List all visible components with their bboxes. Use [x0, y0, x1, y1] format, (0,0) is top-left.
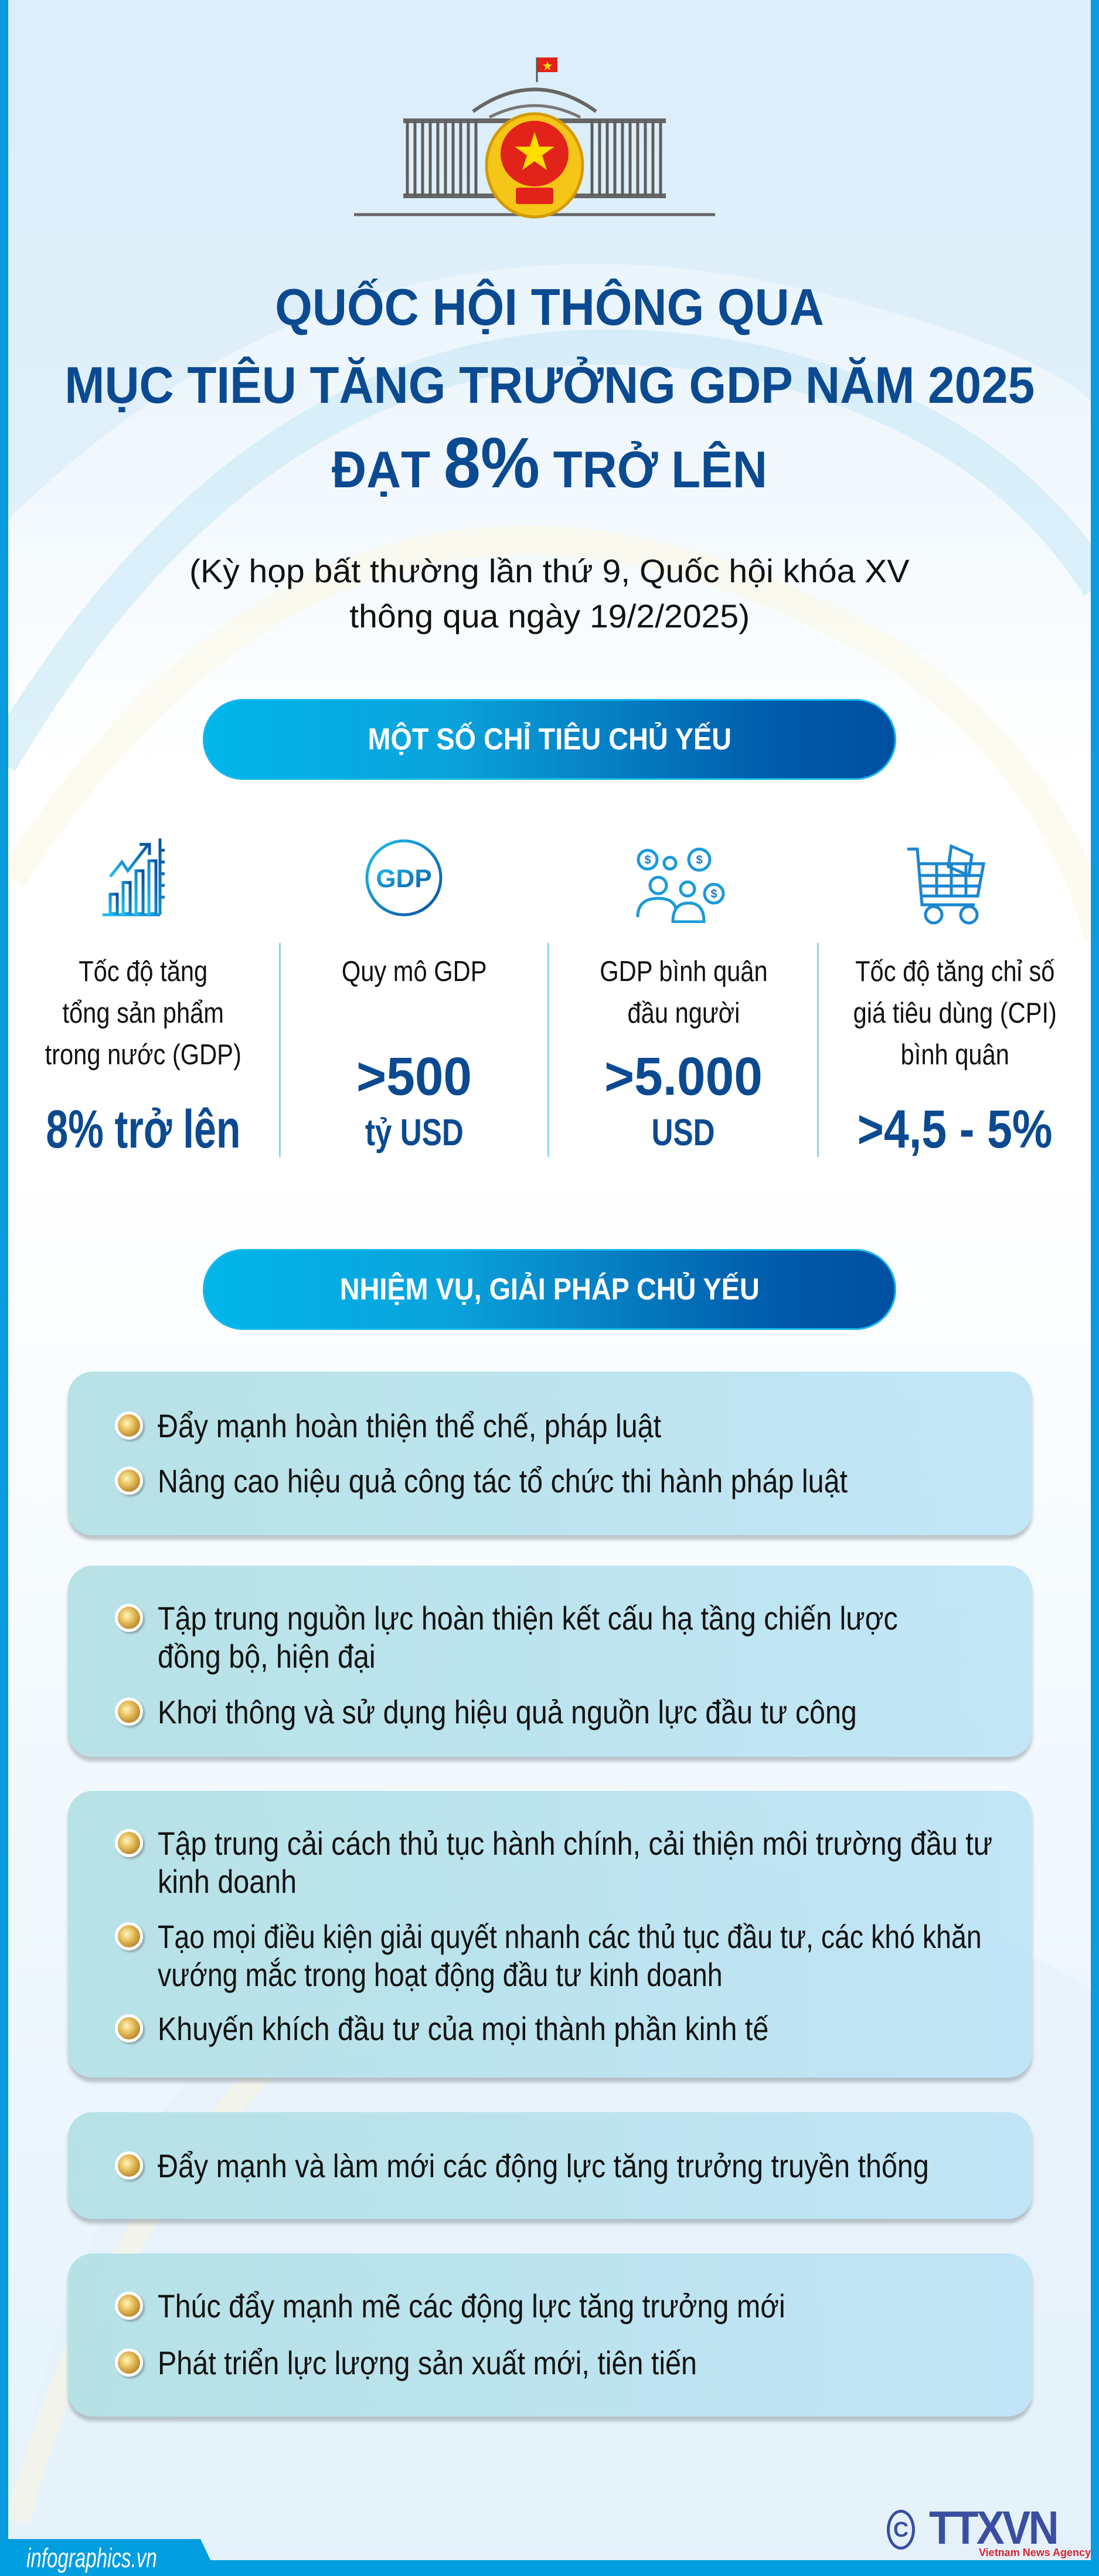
stat: GDP size: >500: [357, 1047, 472, 1107]
frame borders: [0, 0, 8, 2576]
panel: hạ tầng: [68, 1566, 1032, 1757]
stat: CPI: giá tiêu dùng (CPI): [853, 997, 1057, 1029]
panel: thể chế: [68, 1372, 1032, 1535]
panel: thủ tục hành chính: Tạo mọi điều kiện giải quyết nhanh các thủ tục đầu tư, các khó khăn: [158, 1918, 982, 1955]
subtitle: [189, 552, 910, 634]
heading: nhiệm vụ, giải pháp chủ yếu: [203, 1249, 896, 1330]
panel: thủ tục hành chính: [68, 1791, 1032, 2078]
panel: hạ tầng: Khơi thông và sử dụng hiệu quả nguồn lực đầu tư công: [158, 1693, 857, 1730]
icon: GDP: GDP: [376, 864, 432, 893]
panel: thủ tục hành chính: Tập trung cải cách thủ tục hành chính, cải thiện môi trường đầu tư: [158, 1825, 992, 1862]
footer tab: infographics.vn: [0, 2539, 211, 2573]
stat: GDP growth: tổng sản phẩm: [62, 997, 224, 1029]
icon: people with coins: $: [644, 854, 651, 867]
heading: một số chỉ tiêu chủ yếu: MỘT SỐ CHỈ TIÊU CHỦ YẾU: [368, 722, 731, 756]
panel: thủ tục hành chính: Khuyến khích đầu tư của mọi thành phần kinh tế: [158, 2010, 768, 2047]
stat: CPI: [853, 956, 1057, 1159]
panel: động lực mới: [68, 2253, 1032, 2417]
stat: GDP growth: 8% trở lên: [46, 1099, 240, 1159]
panel: thể chế: Đẩy mạnh hoàn thiện thể chế, pháp luật: [158, 1407, 661, 1444]
stat: GDP per capita: [600, 956, 767, 1153]
stat: CPI: Tốc độ tăng chỉ số: [855, 956, 1054, 987]
icon: shopping cart: [907, 844, 985, 924]
stat: GDP size: tỷ USD: [365, 1111, 464, 1153]
subtitle: (Kỳ họp bất thường lần thứ 9, Quốc hội khóa XV: [189, 552, 910, 589]
logo: TTXVN: TTXVN: [929, 2502, 1057, 2554]
icon: growth chart: [103, 839, 165, 916]
panel: thể chế: Nâng cao hiệu quả công tác tổ chức thi hành pháp luật: [158, 1462, 848, 1499]
stat: GDP size: Quy mô GDP: [342, 956, 487, 987]
panel: thủ tục hành chính: kinh doanh: [158, 1863, 297, 1900]
title: QUỐC HỘI THÔNG QUA: [275, 278, 824, 336]
panel: động lực mới: Phát triển lực lượng sản xuất mới, tiên tiến: [158, 2344, 697, 2381]
logo: TTXVN: Vietnam News Agency: [979, 2547, 1091, 2558]
title: [64, 278, 1035, 503]
panel: động lực truyền thống: [68, 2112, 1032, 2219]
stat: GDP growth: trong nước (GDP): [45, 1039, 241, 1071]
icon: people with coins: $: [696, 854, 703, 867]
panel: hạ tầng: đồng bộ, hiện đại: [158, 1638, 376, 1675]
dividers: [279, 943, 281, 1157]
stat: CPI: >4,5 - 5%: [858, 1099, 1052, 1159]
icon: people with coins: $: [710, 888, 717, 901]
icon: national assembly emblem: [354, 57, 715, 218]
panel: thủ tục hành chính: vướng mắc trong hoạt động đầu tư kinh doanh: [158, 1956, 723, 1993]
stat: GDP per capita: USD: [652, 1111, 715, 1153]
stat: GDP size: [342, 956, 487, 1153]
stat: GDP growth: [45, 956, 241, 1159]
stat: CPI: bình quân: [900, 1039, 1009, 1071]
stat: GDP per capita: đầu người: [627, 997, 740, 1029]
logo: TTXVN: C: [893, 2517, 909, 2541]
stat: GDP per capita: GDP bình quân: [600, 956, 767, 987]
subtitle: thông qua ngày 19/2/2025): [349, 598, 750, 634]
panel: động lực mới: Thúc đẩy mạnh mẽ các động lực tăng trưởng mới: [158, 2287, 785, 2324]
heading: một số chỉ tiêu chủ yếu: [203, 699, 896, 780]
panel: động lực truyền thống: Đẩy mạnh và làm mới các động lực tăng trưởng truyền thống: [158, 2147, 929, 2184]
icon: people with coins: [637, 848, 724, 923]
footer tab: infographics.vn: infographics.vn: [26, 2543, 157, 2573]
footer bar: [0, 2560, 1099, 2576]
logo: TTXVN: [887, 2502, 1091, 2558]
title: ĐẠT 8% TRỞ LÊN: [332, 423, 767, 503]
stat: GDP growth: Tốc độ tăng: [79, 956, 207, 987]
icon: GDP: [366, 840, 442, 916]
heading: nhiệm vụ, giải pháp chủ yếu: NHIỆM VỤ, GIẢI PHÁP CHỦ YẾU: [339, 1272, 759, 1306]
stat: GDP per capita: >5.000: [604, 1047, 763, 1107]
panel: hạ tầng: Tập trung nguồn lực hoàn thiện kết cấu hạ tầng chiến lược: [158, 1600, 898, 1637]
title: MỤC TIÊU TĂNG TRƯỞNG GDP NĂM 2025: [64, 356, 1035, 414]
